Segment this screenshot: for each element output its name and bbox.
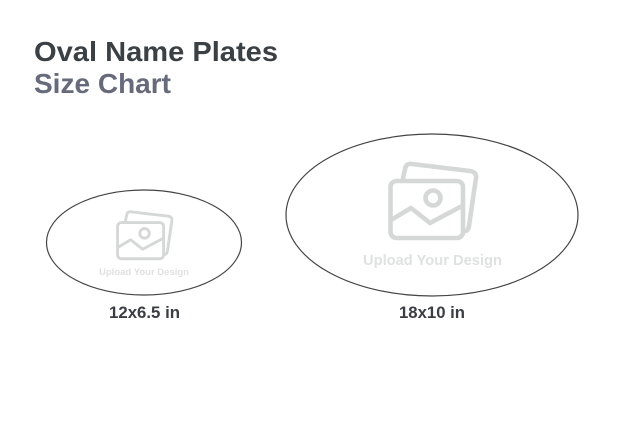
panel: large oval 18x10 in [286, 134, 578, 322]
small upload caption: Upload Your Design [99, 267, 189, 278]
icon: small image placeholder [118, 212, 172, 259]
panel: small oval 12x6.5 in [46, 190, 242, 322]
title: Oval Name Plates [34, 36, 278, 67]
title [34, 36, 278, 99]
small oval outline [46, 190, 242, 295]
icon: large image placeholder [390, 164, 476, 238]
large upload caption: Upload Your Design [363, 253, 502, 269]
large oval outline [286, 134, 578, 296]
title: Size Chart [34, 68, 171, 99]
large size label: 18x10 in [399, 304, 465, 322]
small size label: 12x6.5 in [109, 304, 180, 322]
